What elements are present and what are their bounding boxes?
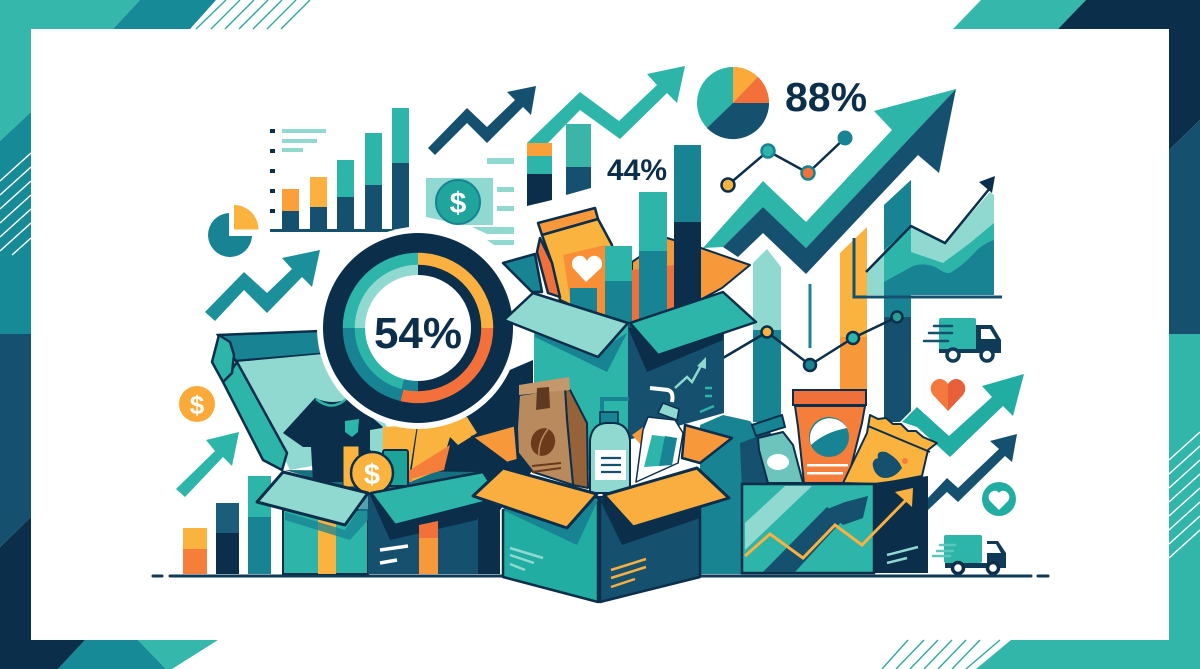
box: center yellow-flap box [472, 377, 732, 602]
icon: dollar bill [426, 158, 514, 245]
icon: heart badge [982, 482, 1016, 516]
lid [212, 330, 400, 470]
stacked bars: top center [527, 124, 591, 206]
coffee bag [517, 377, 588, 488]
pump bottle white [636, 388, 683, 482]
line chart with nodes: top [722, 130, 852, 192]
arrow: yellow trend [745, 488, 913, 558]
icon: dollar coin: $ [190, 390, 205, 420]
flaps [504, 293, 628, 357]
front face [742, 484, 874, 573]
right face [874, 476, 928, 573]
arrow: small teal [176, 432, 239, 497]
side box: behind right box [700, 415, 800, 574]
chip bag [843, 415, 937, 484]
pump bottle teal [590, 399, 630, 493]
orange bag [537, 208, 612, 325]
icon: delivery truck bottom [933, 535, 1006, 574]
icon: dollar coin [179, 386, 215, 422]
coin stack and wallet: $ [364, 459, 380, 491]
icon: small pie chart [208, 205, 258, 257]
arrow: right teal [902, 374, 1024, 457]
jar: orange [793, 390, 866, 483]
right face [600, 490, 700, 602]
arrow: navy zigzag [428, 86, 536, 155]
ground line [153, 574, 1048, 578]
pie chart: 88% [697, 67, 769, 139]
flaps [257, 472, 368, 525]
arrow: right navy [928, 434, 1017, 510]
back flaps [503, 238, 750, 325]
area chart [854, 176, 1002, 297]
small bar chart: bottom left [183, 476, 271, 574]
box: upper center open box [503, 145, 756, 470]
coin stack and wallet [343, 446, 408, 494]
navy backdrop behind boxes [400, 360, 533, 574]
stat: 44%: 44% [607, 154, 667, 187]
navy t-shirt [283, 398, 383, 482]
bottle: right box [752, 415, 803, 483]
ring chart: 54% [317, 227, 519, 429]
arrow: teal zigzag top [527, 66, 685, 143]
box faces [534, 320, 724, 470]
arrow: left teal zigzag [205, 250, 320, 321]
tall columns: right of center [753, 180, 911, 422]
icon: delivery truck top [924, 318, 1001, 361]
stat: 54%: 54% [374, 309, 462, 358]
flaps [473, 468, 597, 528]
left face [283, 495, 368, 574]
orange shirt [382, 417, 477, 482]
arrow: big two-tone growth arrow [703, 89, 956, 274]
icon: heart orange [931, 379, 965, 411]
icon: dollar bill: $ [450, 187, 467, 220]
bar chart: top left [270, 108, 409, 232]
stat: 88%: 88% [785, 74, 867, 120]
box: left open box with apparel [212, 330, 500, 574]
line chart with nodes: middle [723, 312, 902, 371]
right face [368, 495, 483, 574]
box: right box with trend arrow [742, 476, 928, 573]
back flaps [472, 425, 732, 463]
left face [503, 495, 598, 602]
back of box interior [285, 470, 480, 495]
bars rising from box [605, 145, 701, 326]
wedge shadow [740, 432, 800, 490]
